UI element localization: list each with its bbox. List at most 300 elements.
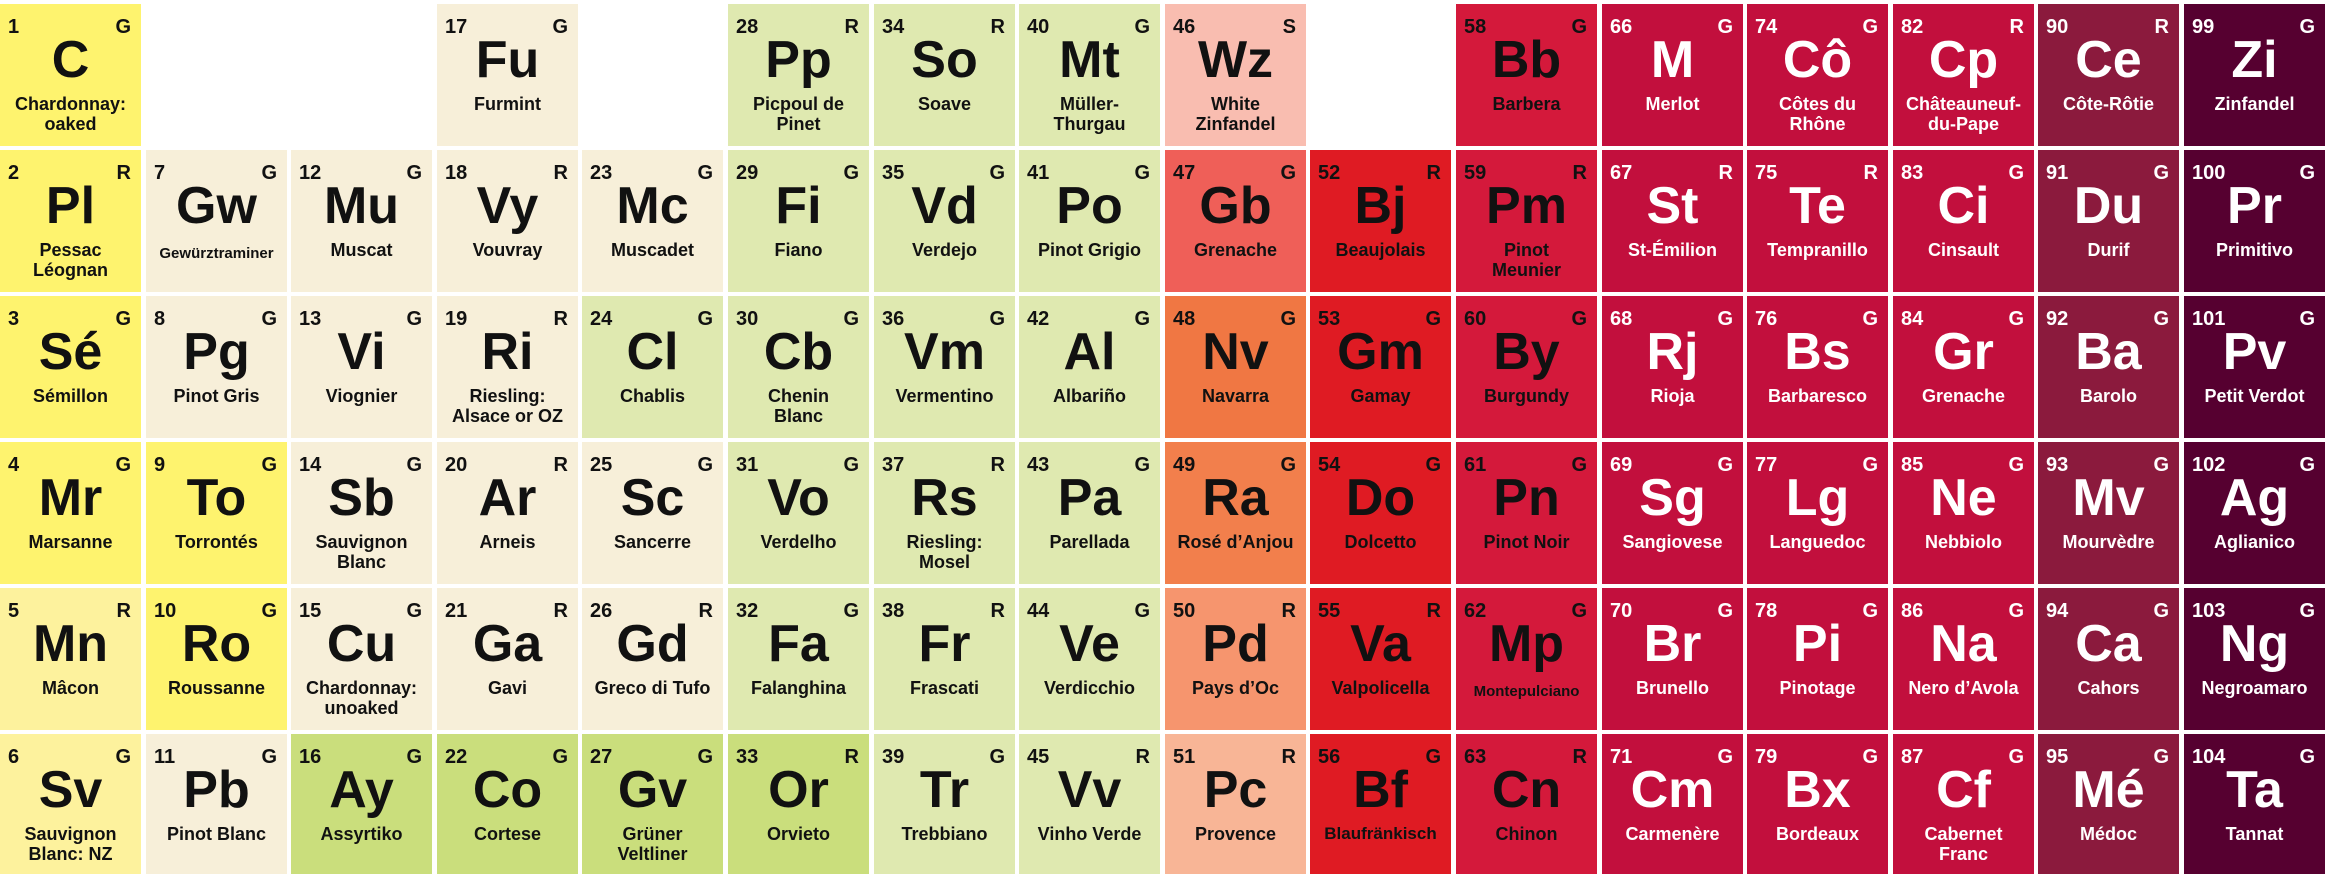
cell: Pi: Pi bbox=[1793, 615, 1842, 673]
cell: Po: 41 bbox=[1027, 162, 1049, 184]
cell: Nv: Nv bbox=[1202, 323, 1269, 381]
cell: Zi: 99 bbox=[2192, 16, 2214, 38]
cell: Co bbox=[437, 734, 578, 874]
cell: Cf: Franc bbox=[1939, 844, 1988, 864]
cell: Or: 33 bbox=[736, 746, 758, 768]
cell: Lg: G bbox=[1862, 454, 1878, 476]
cell: Cu: G bbox=[406, 600, 422, 622]
cell: Vv: Vv bbox=[1058, 761, 1121, 819]
cell: Cp: R bbox=[2010, 16, 2024, 38]
cell: St bbox=[1602, 150, 1743, 292]
cell: Pv bbox=[2184, 296, 2325, 438]
cell: Nv bbox=[1165, 296, 1306, 438]
cell: Pg: G bbox=[261, 308, 277, 330]
cell: Ca: G bbox=[2153, 600, 2169, 622]
cell: Cô: Côtes du bbox=[1779, 94, 1856, 114]
cell: Pl: Léognan bbox=[33, 260, 108, 280]
cell: Vo: G bbox=[843, 454, 859, 476]
cell: Ng: G bbox=[2299, 600, 2315, 622]
cell: Vm bbox=[874, 296, 1015, 438]
column 6 bbox=[728, 4, 869, 874]
cell: Pp bbox=[728, 4, 869, 146]
cell: Sc bbox=[582, 442, 723, 584]
cell: Pa: 43 bbox=[1027, 454, 1049, 476]
cell: Ne: Ne bbox=[1930, 469, 1997, 527]
cell: Du: 91 bbox=[2046, 162, 2068, 184]
cell: Pd: 50 bbox=[1173, 600, 1195, 622]
cell: Mc: Mc bbox=[616, 177, 689, 235]
cell: Nv: Navarra bbox=[1202, 386, 1269, 406]
cell: Mr: G bbox=[115, 454, 131, 476]
cell: Cb: G bbox=[843, 308, 859, 330]
cell: Gd: Gd bbox=[616, 615, 689, 673]
cell: Gw: Gewürztraminer bbox=[159, 245, 274, 262]
cell: Zi: Zi bbox=[2231, 31, 2278, 89]
cell: Pd: Pays d’Oc bbox=[1192, 678, 1279, 698]
cell: Vm: Vermentino bbox=[895, 386, 994, 406]
cell: Ba: G bbox=[2153, 308, 2169, 330]
cell: Ce: 90 bbox=[2046, 16, 2068, 38]
cell: Lg bbox=[1747, 442, 1888, 584]
cell: Ng: 103 bbox=[2192, 600, 2225, 622]
cell: Pg bbox=[146, 296, 287, 438]
cell: Nv: G bbox=[1280, 308, 1296, 330]
cell: Cf bbox=[1893, 734, 2034, 874]
cell: Ca: Cahors bbox=[2077, 678, 2140, 698]
cell: Ri: 19 bbox=[445, 308, 467, 330]
cell: Pn: G bbox=[1571, 454, 1587, 476]
cell: Ba: Ba bbox=[2075, 323, 2142, 381]
cell: Fi: 29 bbox=[736, 162, 758, 184]
cell: So: R bbox=[991, 16, 1005, 38]
cell: Mp: Montepulciano bbox=[1474, 683, 1579, 700]
cell: Vd bbox=[874, 150, 1015, 292]
cell: Du: Durif bbox=[2088, 240, 2130, 260]
cell: Cô: Rhône bbox=[1790, 114, 1846, 134]
cell: Gv bbox=[582, 734, 723, 874]
cell: Ba: 92 bbox=[2046, 308, 2068, 330]
cell: Br: 70 bbox=[1610, 600, 1632, 622]
cell: Rj: 68 bbox=[1610, 308, 1632, 330]
cell: Gr bbox=[1893, 296, 2034, 438]
cell: Ro: 10 bbox=[154, 600, 176, 622]
cell: Vy: Vouvray bbox=[473, 240, 542, 260]
cell: Pp: 28 bbox=[736, 16, 758, 38]
cell: St: 67 bbox=[1610, 162, 1632, 184]
cell: Ga: 21 bbox=[445, 600, 467, 622]
cell: Sé: G bbox=[115, 308, 131, 330]
cell: Pg: 8 bbox=[154, 308, 165, 330]
cell: Pc: 51 bbox=[1173, 746, 1195, 768]
cell: Po: Pinot Grigio bbox=[1038, 240, 1141, 260]
column 10 bbox=[1310, 150, 1451, 874]
cell: Bs: Bs bbox=[1784, 323, 1851, 381]
cell: Mp: 62 bbox=[1464, 600, 1486, 622]
cell: Gm: Gm bbox=[1337, 323, 1424, 381]
cell: Va: R bbox=[1427, 600, 1441, 622]
cell: Cp bbox=[1893, 4, 2034, 146]
cell: Mv bbox=[2038, 442, 2179, 584]
cell: Cp: Cp bbox=[1929, 31, 1998, 89]
cell: Wz: Zinfandel bbox=[1196, 114, 1276, 134]
cell: Ar: R bbox=[554, 454, 568, 476]
cell: Gb: Gb bbox=[1199, 177, 1272, 235]
cell: Cp: du-Pape bbox=[1928, 114, 1999, 134]
cell: Pg: Pinot Gris bbox=[173, 386, 260, 406]
cell: Ag: Ag bbox=[2220, 469, 2289, 527]
cell: Fu: Fu bbox=[476, 31, 539, 89]
cell: Mr: Marsanne bbox=[28, 532, 113, 552]
cell: Ce: R bbox=[2155, 16, 2169, 38]
cell: Gm: G bbox=[1425, 308, 1441, 330]
cell: Fu: Furmint bbox=[474, 94, 541, 114]
cell: Sé bbox=[0, 296, 141, 438]
cell: Co: Co bbox=[473, 761, 542, 819]
cell: Mc: Muscadet bbox=[611, 240, 694, 260]
cell: Pl: R bbox=[117, 162, 131, 184]
cell: Vm: 36 bbox=[882, 308, 904, 330]
cell: Te: R bbox=[1864, 162, 1878, 184]
cell: Mp: G bbox=[1571, 600, 1587, 622]
cell: Cm: 71 bbox=[1610, 746, 1632, 768]
cell: Rs: Rs bbox=[911, 469, 978, 527]
cell: Ro: Ro bbox=[182, 615, 251, 673]
cell: M: G bbox=[1717, 16, 1733, 38]
cell: Wz: 46 bbox=[1173, 16, 1195, 38]
cell: Ta: 104 bbox=[2192, 746, 2225, 768]
cell: Vv: 45 bbox=[1027, 746, 1049, 768]
cell: C: G bbox=[115, 16, 131, 38]
cell: Mv: Mv bbox=[2072, 469, 2145, 527]
cell: Vo: Verdelho bbox=[760, 532, 837, 552]
cell: Pb: G bbox=[261, 746, 277, 768]
cell: By: By bbox=[1493, 323, 1560, 381]
cell: Vi: Vi bbox=[337, 323, 386, 381]
cell: Pi: Pinotage bbox=[1779, 678, 1856, 698]
cell: Sb bbox=[291, 442, 432, 584]
cell: Ci: 83 bbox=[1901, 162, 1923, 184]
cell: Ro bbox=[146, 588, 287, 730]
column 11 bbox=[1456, 4, 1597, 874]
cell: Fr: R bbox=[991, 600, 1005, 622]
cell: By: 60 bbox=[1464, 308, 1486, 330]
cell: Ne: Nebbiolo bbox=[1925, 532, 2002, 552]
cell: Tr: 39 bbox=[882, 746, 904, 768]
cell: Mv: Mourvèdre bbox=[2062, 532, 2155, 552]
cell: Ra: 49 bbox=[1173, 454, 1195, 476]
cell: Na bbox=[1893, 588, 2034, 730]
cell: Ay bbox=[291, 734, 432, 874]
cell: Co: G bbox=[552, 746, 568, 768]
cell: Gr: Grenache bbox=[1922, 386, 2005, 406]
cell: Pa bbox=[1019, 442, 1160, 584]
cell: Rj: G bbox=[1717, 308, 1733, 330]
cell: Or: R bbox=[845, 746, 859, 768]
cell: Gw: G bbox=[261, 162, 277, 184]
cell: Vo: 31 bbox=[736, 454, 758, 476]
cell: C: 1 bbox=[8, 16, 19, 38]
cell: Bj bbox=[1310, 150, 1451, 292]
cell: Cô: G bbox=[1862, 16, 1878, 38]
cell: Mc: G bbox=[697, 162, 713, 184]
cell: Fu bbox=[437, 4, 578, 146]
cell: Lg: Lg bbox=[1786, 469, 1849, 527]
cell: Te bbox=[1747, 150, 1888, 292]
cell: Pa: Parellada bbox=[1049, 532, 1130, 552]
column 3 bbox=[291, 150, 432, 874]
cell: Vd: 35 bbox=[882, 162, 904, 184]
cell: Bx bbox=[1747, 734, 1888, 874]
cell: By: Burgundy bbox=[1484, 386, 1569, 406]
cell: St: R bbox=[1719, 162, 1733, 184]
cell: Sv bbox=[0, 734, 141, 874]
cell: Mt: G bbox=[1134, 16, 1150, 38]
cell: Ta: G bbox=[2299, 746, 2315, 768]
cell: Na: 86 bbox=[1901, 600, 1923, 622]
cell: Al: 42 bbox=[1027, 308, 1049, 330]
cell: Mn: Mâcon bbox=[42, 678, 99, 698]
column 16 bbox=[2184, 4, 2325, 874]
cell: Cp: Châteauneuf- bbox=[1906, 94, 2021, 114]
cell: Mc bbox=[582, 150, 723, 292]
cell: Pm: Pm bbox=[1486, 177, 1567, 235]
cell: Pr: Pr bbox=[2227, 177, 2282, 235]
cell: Bx: Bx bbox=[1784, 761, 1851, 819]
cell: Sg bbox=[1602, 442, 1743, 584]
cell: Bx: Bordeaux bbox=[1776, 824, 1859, 844]
cell: Sc: 25 bbox=[590, 454, 612, 476]
cell: Sv: G bbox=[115, 746, 131, 768]
cell: Pd: R bbox=[1282, 600, 1296, 622]
cell: Tr: Trebbiano bbox=[901, 824, 988, 844]
cell: Sc: Sancerre bbox=[614, 532, 691, 552]
cell: Cu bbox=[291, 588, 432, 730]
cell: Ng bbox=[2184, 588, 2325, 730]
cell: Ro: G bbox=[261, 600, 277, 622]
cell: Vv: R bbox=[1136, 746, 1150, 768]
cell: Bx: G bbox=[1862, 746, 1878, 768]
cell: Wz: White bbox=[1211, 94, 1260, 114]
cell: Mv: G bbox=[2153, 454, 2169, 476]
cell: By bbox=[1456, 296, 1597, 438]
cell: Pi bbox=[1747, 588, 1888, 730]
column 15 bbox=[2038, 4, 2179, 874]
cell: Rs: Riesling: bbox=[906, 532, 982, 552]
cell: Br: Br bbox=[1644, 615, 1701, 673]
cell: Mr bbox=[0, 442, 141, 584]
cell: Al: Albariño bbox=[1053, 386, 1126, 406]
cell: Ta: Ta bbox=[2226, 761, 2283, 819]
column 9: rosé bbox=[1165, 4, 1306, 874]
cell: Pv: Pv bbox=[2223, 323, 2286, 381]
cell: Mé: Médoc bbox=[2080, 824, 2137, 844]
cell: Pa: Pa bbox=[1058, 469, 1121, 527]
cell: Pl: Pessac bbox=[39, 240, 102, 260]
cell: Bj: R bbox=[1427, 162, 1441, 184]
cell: Pm: Pinot bbox=[1504, 240, 1549, 260]
cell: Ve: Ve bbox=[1059, 615, 1120, 673]
cell: Mé: 95 bbox=[2046, 746, 2068, 768]
cell: Vd: G bbox=[989, 162, 1005, 184]
cell: Pr: 100 bbox=[2192, 162, 2225, 184]
cell: To: Torrontés bbox=[175, 532, 258, 552]
cell: Du: G bbox=[2153, 162, 2169, 184]
cell: Br: Brunello bbox=[1636, 678, 1709, 698]
cell: Ci: Ci bbox=[1938, 177, 1990, 235]
cell: Cb: 30 bbox=[736, 308, 758, 330]
cell: So: 34 bbox=[882, 16, 904, 38]
cell: Du: Du bbox=[2074, 177, 2143, 235]
cell: Gv: 27 bbox=[590, 746, 612, 768]
cell: Ca: 94 bbox=[2046, 600, 2068, 622]
cell: Ag: 102 bbox=[2192, 454, 2225, 476]
cell: Pp: Pinet bbox=[776, 114, 820, 134]
cell: Pm: Meunier bbox=[1492, 260, 1561, 280]
cell: So bbox=[874, 4, 1015, 146]
cell: Ci: Cinsault bbox=[1928, 240, 1999, 260]
cell: Ro: Roussanne bbox=[168, 678, 265, 698]
cell: Cu: unoaked bbox=[324, 698, 398, 718]
cell: Rs: R bbox=[991, 454, 1005, 476]
cell: Sé: Sémillon bbox=[33, 386, 108, 406]
cell: Rs: Mosel bbox=[919, 552, 970, 572]
cell: Mt: Mt bbox=[1059, 31, 1120, 89]
cell: M: 66 bbox=[1610, 16, 1632, 38]
cell: Fr: Frascati bbox=[910, 678, 979, 698]
cell: Ri: R bbox=[554, 308, 568, 330]
cell: Do: Do bbox=[1346, 469, 1415, 527]
cell: M: M bbox=[1651, 31, 1694, 89]
cell: Pl: Pl bbox=[46, 177, 95, 235]
cell: Cn: R bbox=[1573, 746, 1587, 768]
cell: Br bbox=[1602, 588, 1743, 730]
cell: Zi bbox=[2184, 4, 2325, 146]
cell: Mt: 40 bbox=[1027, 16, 1049, 38]
cell: To: G bbox=[261, 454, 277, 476]
cell: Ga bbox=[437, 588, 578, 730]
cell: Wz: Wz bbox=[1198, 31, 1273, 89]
cell: Vo bbox=[728, 442, 869, 584]
cell: Pc: Provence bbox=[1195, 824, 1276, 844]
column 7 bbox=[874, 4, 1015, 874]
cell: Mr: 4 bbox=[8, 454, 19, 476]
cell: Mn bbox=[0, 588, 141, 730]
cell: To: 9 bbox=[154, 454, 165, 476]
cell: Fa: Fa bbox=[768, 615, 829, 673]
cell: M: Merlot bbox=[1646, 94, 1700, 114]
cell: Bf: 56 bbox=[1318, 746, 1340, 768]
cell: Ra bbox=[1165, 442, 1306, 584]
cell: Fr: 38 bbox=[882, 600, 904, 622]
cell: Ne: 85 bbox=[1901, 454, 1923, 476]
cell: Do: G bbox=[1425, 454, 1441, 476]
cell: Na: Nero d’Avola bbox=[1908, 678, 2019, 698]
cell: C bbox=[0, 4, 141, 146]
cell: Vv: Vinho Verde bbox=[1038, 824, 1141, 844]
cell: Pv: Petit Verdot bbox=[2204, 386, 2305, 406]
cell: Vo: Vo bbox=[767, 469, 830, 527]
cell: Vi: 13 bbox=[299, 308, 321, 330]
cell: Ar: 20 bbox=[445, 454, 467, 476]
cell: Sc: G bbox=[697, 454, 713, 476]
cell: Va: Valpolicella bbox=[1331, 678, 1430, 698]
cell: Vd: Verdejo bbox=[912, 240, 977, 260]
cell: Cm: G bbox=[1717, 746, 1733, 768]
cell: Pv: 101 bbox=[2192, 308, 2225, 330]
cell: Va bbox=[1310, 588, 1451, 730]
cell: By: G bbox=[1571, 308, 1587, 330]
cell: Bs: G bbox=[1862, 308, 1878, 330]
cell: Ci bbox=[1893, 150, 2034, 292]
cell: Ri: Alsace or OZ bbox=[452, 406, 563, 426]
cell: So: So bbox=[911, 31, 978, 89]
cell: Pp: Picpoul de bbox=[753, 94, 844, 114]
cell: Tr: G bbox=[989, 746, 1005, 768]
cell: Bf bbox=[1310, 734, 1451, 874]
cell: Sé: Sé bbox=[39, 323, 102, 381]
cell: Ta bbox=[2184, 734, 2325, 874]
cell: Sé: 3 bbox=[8, 308, 19, 330]
cell: Sg: Sangiovese bbox=[1622, 532, 1723, 552]
cell: Fr bbox=[874, 588, 1015, 730]
cell: Gb: Grenache bbox=[1194, 240, 1277, 260]
cell: Gm: Gamay bbox=[1350, 386, 1411, 406]
cell: Mv: 93 bbox=[2046, 454, 2068, 476]
cell: Bs: 76 bbox=[1755, 308, 1777, 330]
cell: Ar: Arneis bbox=[479, 532, 536, 552]
cell: Ag: G bbox=[2299, 454, 2315, 476]
cell: Ay: G bbox=[406, 746, 422, 768]
cell: Fi: Fiano bbox=[774, 240, 822, 260]
cell: Pr: G bbox=[2299, 162, 2315, 184]
cell: Ay: 16 bbox=[299, 746, 321, 768]
cell: Gr: Gr bbox=[1933, 323, 1994, 381]
cell: Do: Dolcetto bbox=[1344, 532, 1416, 552]
cell: Ri bbox=[437, 296, 578, 438]
cell: Pa: G bbox=[1134, 454, 1150, 476]
cell: Pb bbox=[146, 734, 287, 874]
cell: Ag bbox=[2184, 442, 2325, 584]
cell: Cn: Cn bbox=[1492, 761, 1561, 819]
cell: Cl: G bbox=[697, 308, 713, 330]
cell: Br: G bbox=[1717, 600, 1733, 622]
cell: Gm bbox=[1310, 296, 1451, 438]
cell: Gb: 47 bbox=[1173, 162, 1195, 184]
cell: Cm: Cm bbox=[1631, 761, 1714, 819]
cell: Te: 75 bbox=[1755, 162, 1777, 184]
cell: Mp bbox=[1456, 588, 1597, 730]
cell: Wz bbox=[1165, 4, 1306, 146]
column 12 bbox=[1602, 4, 1743, 874]
cell: Al bbox=[1019, 296, 1160, 438]
cell: Zi: G bbox=[2299, 16, 2315, 38]
cell: Ca bbox=[2038, 588, 2179, 730]
cell: Cf: 87 bbox=[1901, 746, 1923, 768]
cell: Cl bbox=[582, 296, 723, 438]
cell: Pn: 61 bbox=[1464, 454, 1486, 476]
cell: Sv: Sv bbox=[39, 761, 102, 819]
cell: Vy: R bbox=[554, 162, 568, 184]
cell: Mt: Thurgau bbox=[1054, 114, 1126, 134]
cell: Mt bbox=[1019, 4, 1160, 146]
cell: Mr: Mr bbox=[39, 469, 102, 527]
cell: Ra: G bbox=[1280, 454, 1296, 476]
cell: Ra: Ra bbox=[1202, 469, 1269, 527]
cell: Pb: Pb bbox=[183, 761, 250, 819]
cell: Vy: Vy bbox=[477, 177, 538, 235]
cell: Gv: Veltliner bbox=[617, 844, 688, 864]
cell: Na: G bbox=[2008, 600, 2024, 622]
